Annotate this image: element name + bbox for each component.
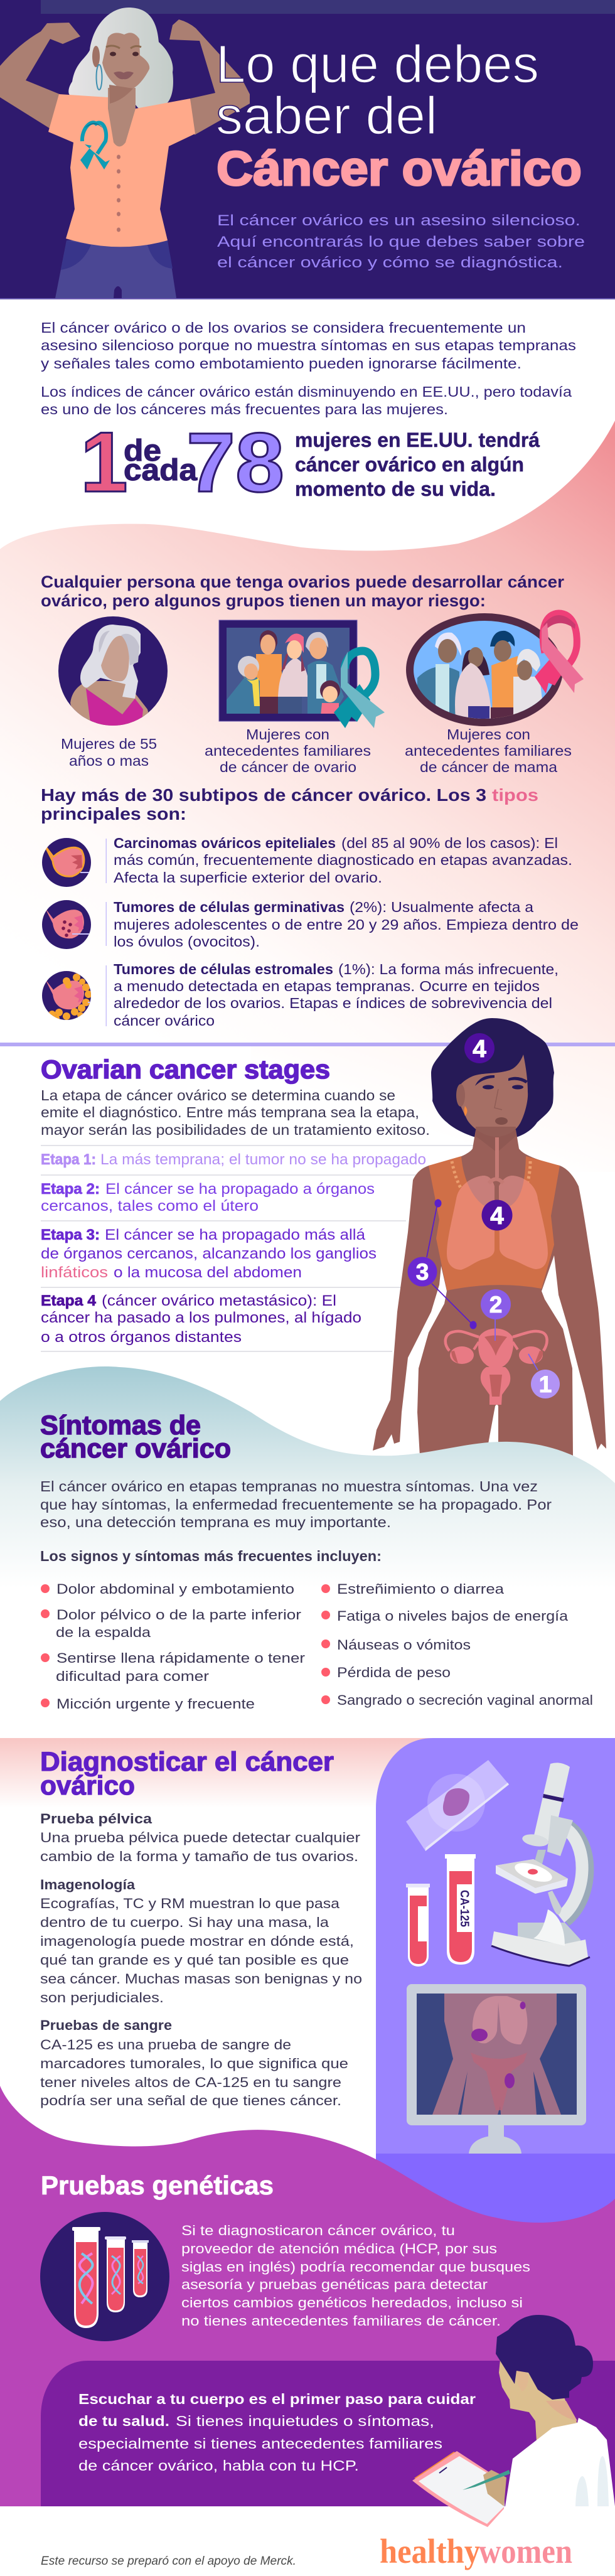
stage 3: linfáticos — [41, 1264, 108, 1281]
text: imaging: son perjudiciales. — [40, 1990, 164, 2005]
intro text — [41, 319, 576, 417]
icon: germ cell ovary — [42, 900, 91, 949]
marker 1 — [531, 1370, 560, 1398]
icon: CA-125 blood tube — [445, 1854, 476, 1965]
list: symptoms left: de la espalda — [56, 1624, 151, 1640]
text: pelvic exam: cambio de la forma y tamaño de tus ovarios. — [40, 1849, 358, 1864]
text: genetic tests: no tienes antecedentes familiares de cáncer. — [181, 2313, 501, 2329]
icon: teal ribbon on shirt — [80, 122, 110, 169]
marker 2 — [481, 1289, 511, 1319]
icon: epithelial ovary — [42, 838, 91, 887]
text: epithelial: (del 85 al 90% de los casos): El — [341, 835, 558, 851]
hero subtitle — [217, 212, 585, 271]
text: blood tests — [40, 2017, 348, 2108]
title: Cáncer ovárico — [217, 142, 582, 196]
stage 4: o a otros órganos distantes — [41, 1329, 242, 1346]
marker 3 — [408, 1257, 437, 1287]
text: germ cell: Tumores de células germinativas — [114, 899, 345, 915]
caption: antecedentes familiares — [405, 743, 572, 759]
heading: subtypes: tipos — [492, 785, 538, 805]
heading: Ovarian cancer stages — [41, 1055, 330, 1084]
stage 3: Etapa 3: — [41, 1226, 100, 1243]
text: epithelial — [105, 835, 572, 886]
icon: blood tube — [406, 1884, 430, 1967]
logo: healthywomen: women — [479, 2532, 572, 2570]
lungs — [447, 1176, 548, 1270]
hero subtitle: Aquí encontrarás lo que debes saber sobre — [217, 233, 585, 250]
stages intro — [41, 1087, 430, 1138]
heading: diagnosis: Diagnosticar el cáncer — [40, 1747, 334, 1777]
icon: CA-125 blood tube: CA-125 — [457, 1890, 471, 1927]
text: imaging: qué tan grande es y qué tan posible es que — [40, 1952, 349, 1968]
heading: symptoms: Síntomas de — [40, 1410, 201, 1441]
heading: risk groups: Cualquier persona que tenga ovarios puede desarrollar cáncer — [41, 572, 565, 591]
heading: subtypes: principales son: — [41, 804, 186, 824]
caption: antecedentes familiares — [205, 743, 371, 759]
stage 2: Etapa 2: — [41, 1181, 100, 1198]
icon: framed family photo with teal ribbon — [219, 620, 385, 728]
hero subtitle: el cáncer ovárico y cómo se diagnóstica. — [217, 254, 563, 271]
panel: diagnosis background — [0, 1738, 452, 1808]
icon: microscope slide — [406, 1760, 509, 1851]
marker 1: 1 — [539, 1371, 552, 1397]
text: genetic tests — [181, 2223, 530, 2329]
marker 2: 2 — [489, 1292, 502, 1318]
statistic: 1 de cada 78 — [80, 414, 540, 510]
text: stromal — [105, 961, 559, 1029]
face — [457, 1055, 528, 1137]
stage 4: Etapa 4 — [41, 1292, 97, 1309]
caption: años o mas — [69, 753, 149, 769]
caption — [405, 726, 572, 775]
callout text: Si tienes inquietudes o síntomas, — [176, 2413, 434, 2429]
statistic: 1 de cada 78: cada — [124, 454, 197, 487]
background: magenta genetic testing section — [0, 2086, 615, 2506]
callout text: Escuchar a tu cuerpo es el primer paso para cuidar — [78, 2391, 476, 2407]
text: imaging: imagenología puede mostrar en dónde está, — [40, 1933, 354, 1949]
icon: microscope — [491, 1763, 590, 1966]
icon: monitor with body scan — [407, 1984, 586, 2154]
panel: call to action — [41, 2361, 615, 2506]
top — [429, 1156, 560, 1291]
illustration: woman flexing arms with teal ribbon — [0, 8, 250, 298]
callout text: de tu salud. — [78, 2413, 169, 2429]
body — [373, 1130, 606, 1456]
marker 4 chest — [482, 1200, 512, 1230]
list: symptoms right — [321, 1581, 593, 1708]
list: symptoms left — [41, 1581, 306, 1712]
caption — [205, 726, 371, 775]
intro text: El cáncer ovárico o de los ovarios se considera frecuentemente un — [41, 319, 526, 336]
heading: diagnosis: ovárico — [40, 1771, 135, 1801]
statistic: 1 de cada 78: mujeres en EE.UU. tendrá — [295, 429, 540, 451]
callout text — [78, 2391, 476, 2474]
text: stromal: Tumores de células estromales — [114, 961, 333, 977]
text: blood tests: Pruebas de sangre — [40, 2017, 172, 2033]
text: symptoms intro: eso, una detección temprana es muy importante. — [40, 1514, 391, 1530]
text: germ cell — [105, 899, 579, 950]
stage 4: (cáncer ovárico metastásico): El — [102, 1292, 336, 1309]
text: pelvic exam: Una prueba pélvica puede detectar cualquier — [40, 1830, 361, 1845]
heading: subtypes — [41, 785, 538, 824]
heading: symptoms — [40, 1410, 231, 1464]
caption: de cáncer de mama — [420, 759, 557, 775]
text: epithelial: Carcinomas ováricos epiteliales — [114, 835, 336, 851]
marker 4 head: 4 — [473, 1036, 486, 1063]
text: stromal: alrededor de los ovarios. Etapas e índices de sobrevivencia del — [114, 995, 552, 1011]
marker 4 head — [464, 1033, 495, 1063]
statistic: 1 de cada 78: cáncer ovárico en algún — [295, 453, 524, 476]
icon: oval family portrait with pink ribbon — [406, 613, 584, 726]
logo: healthywomen — [380, 2532, 572, 2570]
text: symptoms intro: El cáncer ovárico en etapas tempranas no muestra síntomas. Una vez — [40, 1478, 538, 1495]
callout text: de cáncer ovárico, habla con tu HCP. — [78, 2457, 359, 2474]
text: genetic tests: siglas en inglés) podría recomendar que busques — [181, 2259, 530, 2275]
text: germ cell: mujeres adolescentes o de entre 20 y 29 años. Empieza dentro de — [114, 916, 579, 933]
title: saber del — [216, 86, 437, 145]
heading: subtypes: Hay más de 30 subtipos de cáncer ovárico. Los 3 — [41, 785, 486, 805]
list: symptoms right: Pérdida de peso — [337, 1665, 451, 1680]
text: blood tests: marcadores tumorales, lo que significa que — [40, 2056, 348, 2071]
statistic: 1 de cada 78: 1 — [80, 414, 128, 510]
list: symptoms left: Dolor abdominal y embotamiento — [56, 1581, 294, 1597]
text: imaging: sea cáncer. Muchas masas son benignas y no — [40, 1971, 362, 1987]
caption: Mujeres de 55 — [61, 736, 157, 752]
text: imaging — [40, 1877, 362, 2005]
text: genetic tests: Si te diagnosticaron cáncer ovárico, tu — [181, 2223, 455, 2238]
text: genetic tests: ciertos cambios genéticos heredados, incluso si — [181, 2295, 523, 2310]
heading: genetic tests: Pruebas genéticas — [41, 2171, 274, 2200]
logo: healthywomen: healthy — [380, 2532, 480, 2570]
text: stromal: cáncer ovárico — [114, 1012, 215, 1029]
stage 1: La más temprana; el tumor no se ha propagado — [100, 1151, 426, 1168]
heading: risk groups: ovárico, pero algunos grupos tienen un mayor riesgo: — [41, 591, 486, 610]
stage 3: de órganos cercanos, alcanzando los ganglios — [41, 1245, 377, 1262]
text: pelvic exam — [40, 1811, 361, 1864]
list: symptoms right: Fatiga o niveles bajos de energía — [337, 1608, 569, 1624]
heading: risk groups — [41, 572, 565, 610]
statistic: 1 de cada 78: de — [124, 434, 161, 468]
callout text: especialmente si tienes antecedentes familiares — [78, 2435, 442, 2452]
list: symptoms right: Náuseas o vómitos — [337, 1637, 471, 1653]
icon: DNA test tubes — [40, 2212, 169, 2341]
text: genetic tests: proveedor de atención médica (HCP, por sus — [181, 2241, 497, 2257]
stage 2 — [41, 1181, 375, 1215]
text: symptoms intro: que hay síntomas, la enfermedad frecuentemente se ha propagado. Por — [40, 1496, 552, 1513]
text: blood tests: tener niveles altos de CA-125 en tu sangre — [40, 2074, 341, 2090]
panel: hero header — [0, 0, 615, 299]
statistic: 1 de cada 78: momento de su vida. — [295, 478, 496, 500]
intro text: y señales tales como embotamiento pueden ignorarse fácilmente. — [41, 355, 521, 372]
caption: de cáncer de ovario — [220, 759, 356, 775]
text: epithelial: más común, frecuentemente diagnosticado en etapas avanzadas. — [114, 852, 572, 868]
hero subtitle: El cáncer ovárico es un asesino silencioso. — [217, 212, 580, 229]
illustration: body figure with cancer stage markers — [373, 1018, 606, 1456]
stages intro: emite el diagnóstico. Entre más temprana sea la etapa, — [41, 1104, 419, 1120]
stage 4 — [41, 1292, 361, 1346]
stages intro: mayor serán las posibilidades de un tratamiento exitoso. — [41, 1122, 430, 1138]
list: symptoms right: Estreñimiento o diarrea — [337, 1581, 505, 1597]
text: imaging: Imagenología — [40, 1877, 135, 1892]
list: symptoms left: Dolor pélvico o de la parte inferior — [56, 1607, 302, 1623]
title: Lo que debes — [216, 35, 539, 94]
background wave: teal gradient — [0, 1366, 615, 1588]
text: genetic tests: asesoría y pruebas genéticas para detectar — [181, 2277, 488, 2292]
title — [216, 35, 582, 196]
list: symptoms left: Sentirse llena rápidamente o tener — [56, 1650, 306, 1666]
footer note: Este recurso se preparó con el apoyo de Merck. — [41, 2554, 296, 2568]
intro text: es uno de los cánceres más frecuentes para las mujeres. — [41, 401, 448, 417]
background wave: pink gradient — [0, 421, 615, 1043]
connector lines — [427, 1207, 538, 1370]
text: blood tests: CA-125 es una prueba de sangre de — [40, 2037, 291, 2053]
heading: diagnosis — [40, 1747, 334, 1801]
heading: symptoms: cáncer ovárico — [40, 1434, 231, 1464]
stage 3: El cáncer se ha propagado más allá — [105, 1226, 366, 1243]
text: stromal: (1%): La forma más infrecuente, — [338, 961, 559, 977]
intro text: asesino silencioso porque no muestra síntomas en sus etapas tempranas — [41, 337, 576, 353]
text: pelvic exam: Prueba pélvica — [40, 1811, 152, 1827]
illustration: doctor with clipboard — [412, 2315, 615, 2527]
list: symptoms left: Micción urgente y frecuente — [56, 1696, 255, 1712]
icon: stromal ovary — [42, 971, 91, 1020]
text: germ cell: (2%): Usualmente afecta a — [350, 899, 533, 915]
caption: Mujeres con — [246, 726, 329, 743]
stage 1: Etapa 1: — [41, 1151, 96, 1168]
panel: stages text — [41, 1055, 474, 1352]
list: symptoms left: dificultad para comer — [56, 1668, 210, 1684]
text: imaging: dentro de tu cuerpo. Si hay una masa, la — [40, 1914, 329, 1930]
text: epithelial: Afecta la superficie exterior del ovario. — [114, 869, 382, 886]
panel: purple illustration column — [376, 1738, 615, 2229]
text: stromal: a menudo detectada en etapas tempranas. Ocurre en tejidos — [114, 978, 540, 994]
text: blood tests: podría ser una señal de que tienes cáncer. — [40, 2093, 341, 2108]
caption — [61, 736, 157, 769]
marker 3: 3 — [416, 1259, 429, 1285]
text: germ cell: los óvulos (ovocitos). — [114, 933, 260, 950]
stage 2: cercanos, tales como el útero — [41, 1198, 259, 1215]
icon: woman aged 55 or over — [58, 616, 168, 734]
statistic: 1 de cada 78: 78 — [186, 416, 284, 510]
intro text: Los índices de cáncer ovárico están disminuyendo en EE.UU., pero todavía — [41, 384, 572, 400]
subheading: symptom list: Los signos y síntomas más frecuentes incluyen: — [40, 1548, 382, 1564]
marker 4 chest: 4 — [490, 1203, 504, 1230]
list: symptoms right: Sangrado o secreción vaginal anormal — [337, 1692, 593, 1708]
stage 4: cáncer ha pasado a los pulmones, al hígado — [41, 1309, 361, 1326]
stages intro: La etapa de cáncer ovárico se determina cuando se — [41, 1087, 395, 1103]
text: symptoms intro — [40, 1478, 552, 1530]
stage 3: o la mucosa del abdomen — [114, 1264, 302, 1281]
text: imaging: Ecografías, TC y RM muestran lo que pasa — [40, 1896, 340, 1911]
stage 3 — [41, 1226, 377, 1281]
stage 2: El cáncer se ha propagado a órganos — [105, 1181, 375, 1198]
uterus — [446, 1328, 547, 1405]
hair — [431, 1018, 554, 1137]
caption: Mujeres con — [447, 726, 530, 743]
